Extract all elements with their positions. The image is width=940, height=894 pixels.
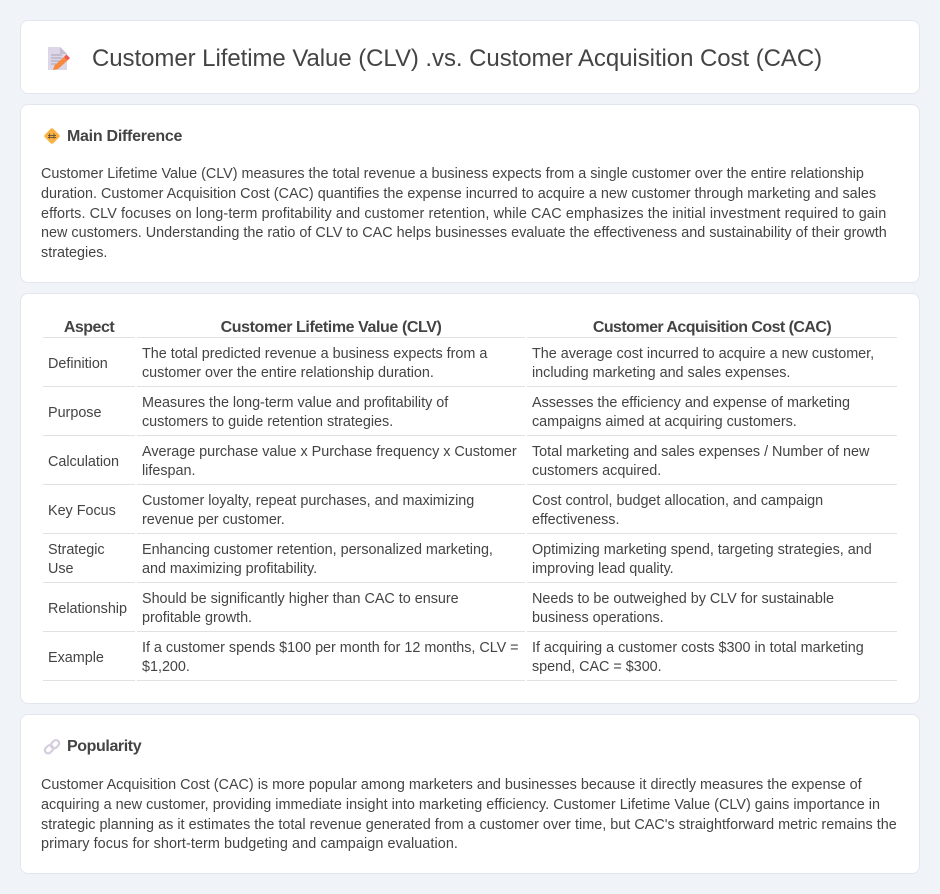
- text block: main difference: Customer Lifetime Value (CLV) measures the total revenue a business expects from a single customer over the entire relationship: [41, 166, 864, 182]
- table: Customer Lifetime Value (CLV): [221, 319, 441, 336]
- table: Calculation: [48, 454, 119, 470]
- table: Measures the long-term value and profitability of: [142, 395, 448, 411]
- table: Definition: [48, 356, 108, 372]
- table: Customer Acquisition Cost (CAC): [593, 319, 831, 336]
- table: spend, CAC = $300.: [532, 659, 662, 675]
- table: campaigns aimed at acquiring customers.: [532, 414, 797, 430]
- panel: header: [20, 20, 920, 94]
- table: and maximizing profitability.: [142, 561, 317, 577]
- text block: popularity: acquiring a new customer, providing immediate insight into marketing efficiency. Customer Lifetime Value (CLV) gains importance in: [41, 797, 880, 813]
- panel: comparison table: [20, 293, 920, 704]
- table: profitable growth.: [142, 610, 252, 626]
- table: Relationship: [48, 601, 127, 617]
- table: Total marketing and sales expenses / Number of new: [532, 444, 869, 460]
- title: Customer Lifetime Value (CLV) .vs. Customer Acquisition Cost (CAC): [92, 45, 822, 72]
- table: Aspect: [64, 319, 114, 336]
- panel: popularity: [20, 714, 920, 874]
- table: effectiveness.: [532, 512, 619, 528]
- heading: popularity: Popularity: [67, 738, 141, 755]
- table: Assesses the efficiency and expense of marketing: [532, 395, 850, 411]
- icon: chain link: [44, 739, 60, 754]
- text block: main difference: efforts. CLV focuses on long-term profitability and customer retention, while CAC emphasizes the initial investment required to gain: [41, 206, 886, 222]
- table: If acquiring a customer costs $300 in total marketing: [532, 640, 864, 656]
- table: Purpose: [48, 405, 101, 421]
- table: Cost control, budget allocation, and campaign: [532, 493, 823, 509]
- panel: main difference: [20, 104, 920, 283]
- table: Optimizing marketing spend, targeting strategies, and: [532, 542, 872, 558]
- table: improving lead quality.: [532, 561, 674, 577]
- text block: main difference: new customers. Understanding the ratio of CLV to CAC helps businesses evaluate the effectiveness and sustainability of their growth: [41, 225, 887, 241]
- text block: popularity: primary focus for short-term budgeting and campaign evaluation.: [41, 836, 458, 852]
- table: including marketing and sales expenses.: [532, 365, 790, 381]
- table: Example: [48, 650, 104, 666]
- text block: popularity: Customer Acquisition Cost (CAC) is more popular among marketers and businesses because it directly measures the expense of: [41, 777, 862, 793]
- table: Customer loyalty, repeat purchases, and maximizing: [142, 493, 474, 509]
- table: Average purchase value x Purchase frequency x Customer: [142, 444, 517, 460]
- table: The average cost incurred to acquire a new customer,: [532, 346, 874, 362]
- table: If a customer spends $100 per month for 12 months, CLV =: [142, 640, 519, 656]
- table: customer over the entire relationship duration.: [142, 365, 434, 381]
- table: The total predicted revenue a business expects from a: [142, 346, 487, 362]
- table: Key Focus: [48, 503, 116, 519]
- table: Use: [48, 561, 74, 577]
- table: Strategic: [48, 542, 105, 558]
- table: $1,200.: [142, 659, 190, 675]
- text block: main difference: strategies.: [41, 245, 107, 261]
- table: Enhancing customer retention, personalized marketing,: [142, 542, 493, 558]
- table: customers to guide retention strategies.: [142, 414, 393, 430]
- table: Should be significantly higher than CAC to ensure: [142, 591, 459, 607]
- text block: popularity: strategic planning as it estimates the total revenue generated from a customer over time, but CAC's straightforward metric remains the: [41, 816, 897, 832]
- table: [43, 319, 897, 681]
- heading: main difference: Main Difference: [67, 128, 182, 145]
- icon: document with pencil: [48, 47, 70, 70]
- table: lifespan.: [142, 463, 195, 479]
- table: business operations.: [532, 610, 664, 626]
- text block: popularity: [41, 777, 897, 852]
- table: revenue per customer.: [142, 512, 285, 528]
- text block: main difference: duration. Customer Acquisition Cost (CAC) quantifies the expense incurred to acquire a new customer through marketing and sales: [41, 186, 876, 202]
- table: Needs to be outweighed by CLV for sustainable: [532, 591, 834, 607]
- icon: warning diamond: [44, 128, 60, 144]
- text block: main difference: [41, 166, 887, 261]
- table: customers acquired.: [532, 463, 661, 479]
